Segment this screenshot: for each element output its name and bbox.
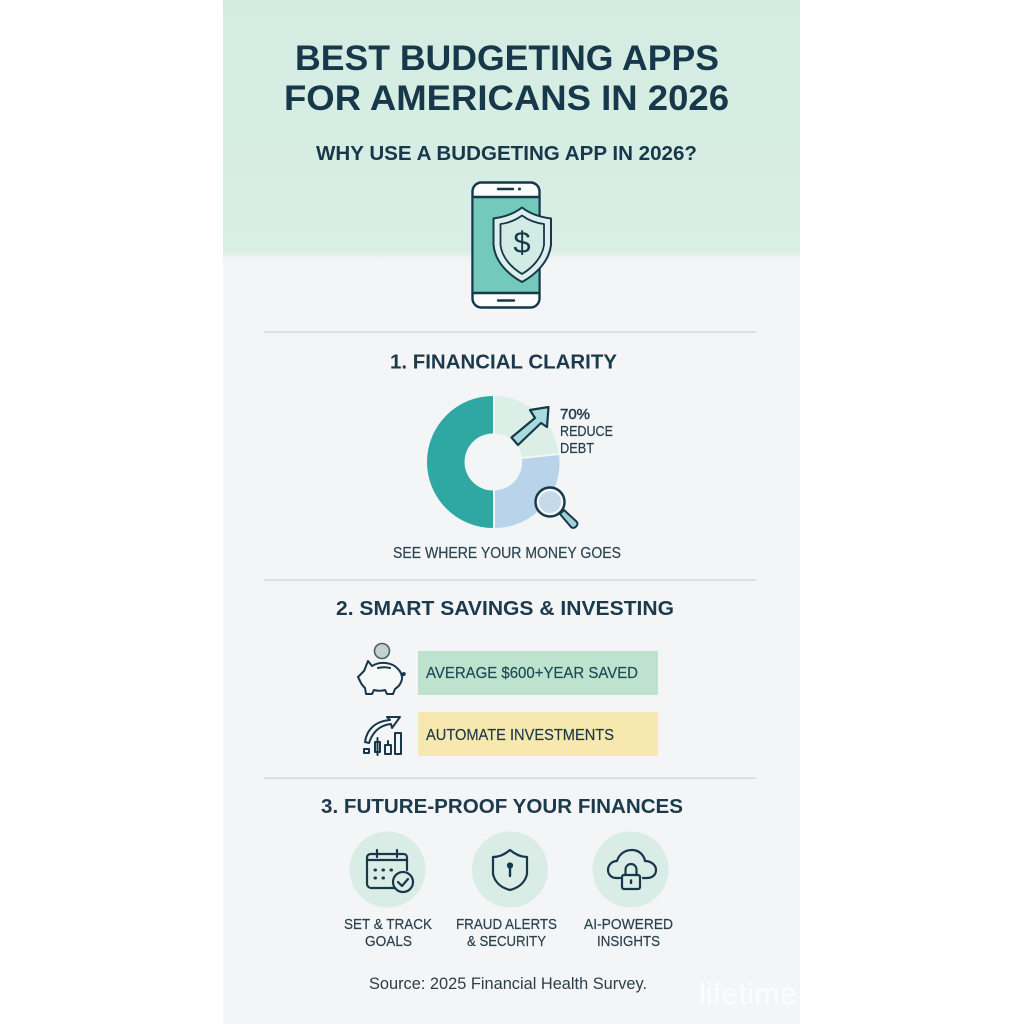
- goals label: GOALS: [365, 934, 412, 950]
- section 2 heading: 2. SMART SAVINGS & INVESTING: [336, 597, 674, 620]
- divider: [264, 332, 756, 333]
- header band: [223, 0, 800, 260]
- donut label: 70% reduce debt: [560, 407, 613, 457]
- icon: phone with dollar shield: $: [513, 225, 531, 260]
- section 3 heading: 3. FUTURE-PROOF YOUR FINANCES: [321, 795, 683, 818]
- watermark: lifetime: [699, 976, 797, 1011]
- donut chart: [427, 396, 559, 528]
- investment bar: automate investments: AUTOMATE INVESTMENTS: [426, 727, 614, 744]
- security label: & SECURITY: [467, 934, 546, 950]
- donut label: 70% reduce debt: 70%: [560, 407, 590, 423]
- insights label: AI-POWERED: [584, 917, 673, 933]
- icon: cloud with lock: [592, 832, 668, 908]
- divider: [264, 580, 756, 581]
- investment bar: automate investments: [418, 712, 658, 756]
- savings bar: average saved: [418, 651, 658, 695]
- page panel: [223, 0, 800, 1024]
- goals label: SET & TRACK: [344, 917, 432, 933]
- divider: [264, 778, 756, 779]
- source note: Source: 2025 Financial Health Survey.: [369, 975, 647, 993]
- icon: magnifying glass: [536, 488, 577, 528]
- icon: piggy bank with coin: [358, 644, 405, 694]
- icon: growth chart with arrow: [364, 717, 401, 755]
- icon: shield with keyhole: [472, 832, 548, 908]
- section 1 heading: 1. FINANCIAL CLARITY: [390, 350, 617, 374]
- insights item: [584, 832, 673, 950]
- goals label: [344, 917, 432, 950]
- icon: phone with dollar shield: [472, 182, 551, 308]
- savings bar: average saved: AVERAGE $600+YEAR SAVED: [426, 665, 638, 682]
- icon: up arrow: [512, 407, 548, 445]
- insights label: [584, 917, 673, 950]
- donut label: 70% reduce debt: DEBT: [560, 441, 594, 457]
- donut label: 70% reduce debt: REDUCE: [560, 424, 613, 440]
- icon: calendar with check: [350, 832, 426, 908]
- security label: FRAUD ALERTS: [456, 917, 557, 933]
- goals item: [344, 832, 432, 950]
- donut caption: SEE WHERE YOUR MONEY GOES: [393, 545, 621, 562]
- title: FOR AMERICANS IN 2026: [284, 78, 729, 118]
- security item: [456, 832, 557, 950]
- security label: [456, 917, 557, 950]
- subtitle: WHY USE A BUDGETING APP IN 2026?: [316, 142, 697, 165]
- title: [284, 38, 729, 118]
- insights label: INSIGHTS: [597, 934, 660, 950]
- title: BEST BUDGETING APPS: [295, 38, 719, 78]
